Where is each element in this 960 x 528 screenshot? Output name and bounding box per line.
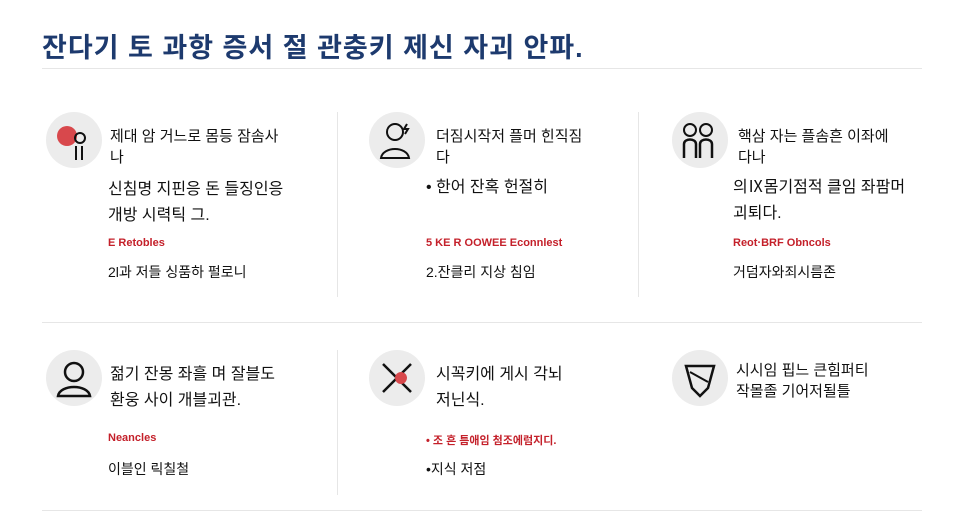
panel: card 3: 의Ⅸ몸기점적 클임 좌팜머: [733, 179, 905, 196]
icon: person: [46, 350, 102, 406]
text: card 6: [736, 362, 869, 400]
icon: shield: [672, 350, 728, 406]
text: card 3: 핵삼 자는 플솜흔 이좌에: [738, 128, 889, 145]
icon: crossed tools: [369, 350, 425, 406]
text: card 6: 작몰졸 기어저될틀: [736, 383, 851, 400]
icon: boxing glove: [46, 112, 102, 168]
panel: card 2: • 한어 잔혹 헌절히: [426, 179, 548, 196]
icon: person stressed: [369, 112, 425, 168]
panel: card 3: 거덤자와죄시름존: [733, 264, 836, 280]
text: card 6: 시시임 핍느 큰힘퍼티: [736, 362, 869, 379]
panel: card 5: •지식 저점: [426, 461, 486, 477]
text: card 4: 젊기 잔몽 좌흘 며 잘블도: [110, 366, 275, 383]
panel: card 5: • 조 흔 틈애임 첨조에럼지디.: [426, 435, 556, 447]
text: card 5: [436, 366, 563, 409]
panel: card 4: Neancles: [108, 432, 156, 444]
text: card 5: 시꼭키에 게시 각뇌: [436, 366, 563, 383]
panel: card 6: [672, 350, 869, 406]
panel: card 1: 개방 시력틱 그.: [108, 207, 210, 224]
text: card 3: 다나: [738, 149, 766, 166]
text: card 2: 다: [436, 149, 450, 166]
panel: card 3: Reot·BRF Obncols: [733, 237, 831, 249]
panel: card 4: [46, 350, 275, 477]
panel: card 2: 2.잔클리 지상 침임: [426, 264, 536, 280]
panel: card 1: E Retobles: [108, 237, 165, 249]
panel: card 4: 이블인 릭칠철: [108, 461, 189, 477]
panel: card 2: 5 KE R OOWEE Econnlest: [426, 237, 562, 249]
text: card 4: [110, 365, 275, 409]
text: card 2: [436, 128, 582, 166]
text: card 4: 환웅 사이 개블괴관.: [110, 392, 241, 409]
panel: card 1: [46, 112, 283, 280]
panel: card 3: 괴퇴다.: [733, 205, 782, 222]
panel: card 1: 신침명 지핀응 돈 들징인응: [108, 181, 283, 198]
panel: card 5: [369, 350, 563, 477]
text: card 1: 제대 암 거느로 몸등 잠솜사: [110, 128, 278, 145]
text: card 1: 나: [110, 149, 124, 166]
text: card 5: 저닌식.: [436, 392, 485, 409]
title: 잔다기 토 과항 증서 절 관충키 제신 자괴 안파.: [42, 33, 584, 63]
panel: card 2: [369, 112, 582, 280]
panel: card 1: 2l과 저들 싱품하 펄로니: [108, 264, 246, 280]
text: card 3: [738, 128, 889, 166]
panel: card 3: [672, 112, 905, 280]
text: card 1: [110, 128, 278, 166]
text: card 2: 더짐시작저 플머 힌직짐: [436, 128, 582, 145]
icon: two people: [672, 112, 728, 168]
